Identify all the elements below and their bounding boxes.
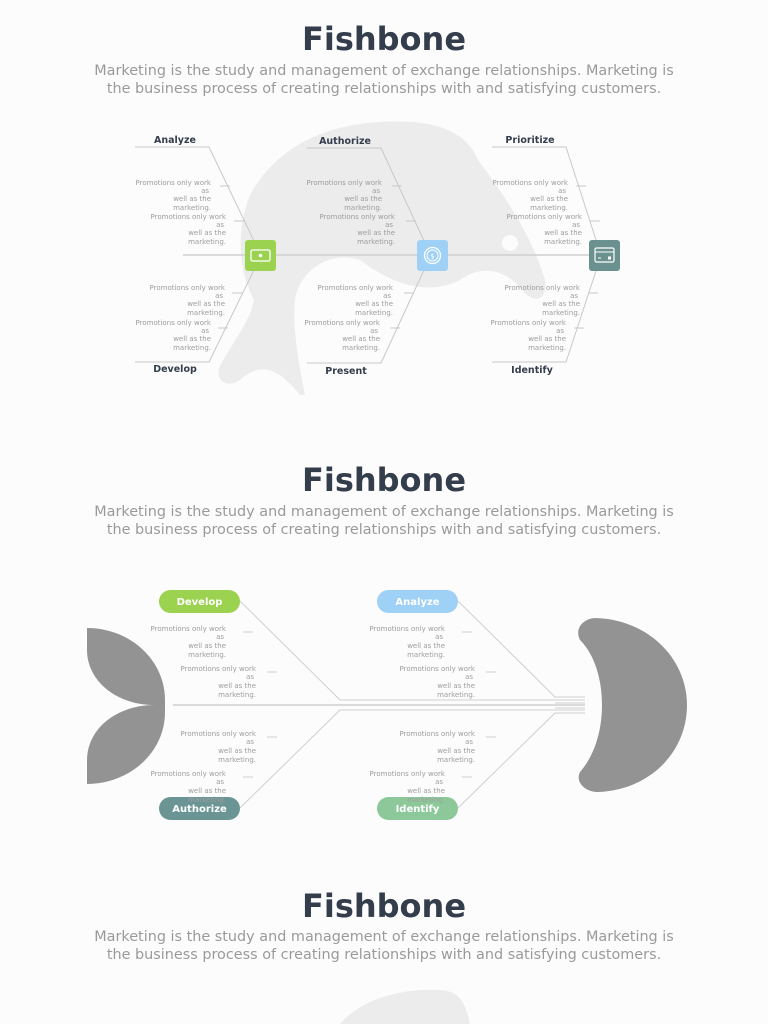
subtitle: section 1: the business process of creating relationships with and satisfying customers. <box>107 80 661 96</box>
text blocks: marketing. <box>407 651 445 659</box>
group: Authorize/Present: well as the <box>344 195 382 203</box>
group: Analyze/Develop: Promotions only work <box>136 319 212 327</box>
text blocks: as <box>246 673 254 681</box>
group: Authorize/Present: as <box>383 292 391 300</box>
text blocks: Promotions only work <box>181 665 257 673</box>
text blocks: Promotions only work <box>370 770 446 778</box>
group: Analyze/Develop: well as the <box>188 229 226 237</box>
head <box>578 618 687 792</box>
group: Prioritize/Identify: as <box>570 292 578 300</box>
text blocks: Promotions only work <box>181 730 257 738</box>
text blocks: as <box>216 778 224 786</box>
group: Authorize/Present: Promotions only work <box>305 319 381 327</box>
text blocks: well as the <box>188 642 226 650</box>
group: Prioritize/Identify: well as the <box>530 195 568 203</box>
text blocks: as <box>216 633 224 641</box>
spine <box>183 254 620 256</box>
group: Analyze/Develop: marketing. <box>187 309 225 317</box>
text blocks: Promotions only work <box>400 665 476 673</box>
group: Prioritize/Identify: Prioritize <box>505 135 555 146</box>
group: Analyze/Develop: well as the <box>187 300 225 308</box>
group: Analyze/Develop: Develop <box>153 364 197 375</box>
group: Authorize/Present: Promotions only work <box>320 213 396 221</box>
group: Prioritize/Identify: as <box>572 221 580 229</box>
text blocks: as <box>465 738 473 746</box>
text blocks: well as the <box>218 682 256 690</box>
text blocks: Promotions only work <box>151 770 227 778</box>
subtitle: section 1: Marketing is the study and management of exchange relationships. Marketing is <box>94 63 674 79</box>
icon: money <box>245 240 276 271</box>
text blocks: marketing. <box>188 651 226 659</box>
group: Analyze/Develop: marketing. <box>173 204 211 212</box>
group: Analyze/Develop: Promotions only work <box>136 179 212 187</box>
group: Authorize/Present: Present <box>325 366 367 377</box>
group: Prioritize/Identify: marketing. <box>542 309 580 317</box>
group: Prioritize/Identify <box>491 135 620 376</box>
group: Prioritize/Identify: marketing. <box>544 238 582 246</box>
subtitle: section 2: Marketing is the study and management of exchange relationships. Marketing is <box>94 504 674 520</box>
text blocks: Promotions only work <box>400 730 476 738</box>
group: Authorize/Present: well as the <box>357 229 395 237</box>
subtitle: section 3: the business process of creating relationships with and satisfying customers. <box>107 946 661 962</box>
text blocks: marketing. <box>437 756 475 764</box>
tail <box>87 628 165 705</box>
group: Authorize/Present: marketing. <box>342 344 380 352</box>
text blocks: marketing. <box>407 796 445 804</box>
group: Authorize/Present: $ <box>430 252 435 260</box>
pill: Analyze <box>377 590 458 613</box>
pill: Develop: Develop <box>177 597 222 608</box>
group: Prioritize/Identify: as <box>556 327 564 335</box>
group: Authorize/Present: as <box>385 221 393 229</box>
group: Prioritize/Identify: well as the <box>542 300 580 308</box>
group: Prioritize/Identify: Promotions only work <box>505 284 581 292</box>
group: Authorize/Present: marketing. <box>355 309 393 317</box>
icon: coin <box>417 240 448 271</box>
text blocks: Promotions only work <box>151 625 227 633</box>
group: Authorize/Present: well as the <box>342 335 380 343</box>
text blocks: marketing. <box>437 691 475 699</box>
group: Prioritize/Identify: Promotions only work <box>507 213 583 221</box>
group: Authorize/Present: marketing. <box>357 238 395 246</box>
text blocks: well as the <box>218 747 256 755</box>
fish silhouette: section 3 partial <box>340 990 470 1024</box>
text blocks: marketing. <box>218 691 256 699</box>
text blocks: well as the <box>407 787 445 795</box>
icon: card <box>589 240 620 271</box>
group: Prioritize/Identify: Promotions only work <box>493 179 569 187</box>
group: Analyze/Develop: marketing. <box>188 238 226 246</box>
group: Authorize/Present: well as the <box>355 300 393 308</box>
diagram 1: fishbone with fish silhouette <box>135 122 620 395</box>
group: Analyze/Develop: Analyze <box>154 135 196 146</box>
pill: Authorize: Authorize <box>172 804 227 815</box>
text blocks: as <box>465 673 473 681</box>
group: Analyze/Develop: well as the <box>173 335 211 343</box>
group: Authorize/Present: as <box>370 327 378 335</box>
text blocks: well as the <box>437 682 475 690</box>
group: Analyze/Develop: Promotions only work <box>151 213 227 221</box>
pill: Identify: Identify <box>396 804 440 815</box>
subtitle: section 2 <box>94 504 674 538</box>
subtitle: section 3: Marketing is the study and management of exchange relationships. Marketing is <box>94 929 674 945</box>
title: section 1: Fishbone <box>302 20 466 58</box>
group: Analyze/Develop: as <box>215 292 223 300</box>
group: Analyze/Develop: as <box>201 327 209 335</box>
subtitle: section 3 <box>94 929 674 962</box>
title: section 3: Fishbone <box>302 887 466 925</box>
text blocks: well as the <box>407 642 445 650</box>
text blocks: as <box>246 738 254 746</box>
group: Prioritize/Identify: marketing. <box>528 344 566 352</box>
group: Authorize/Present: Authorize <box>319 136 371 147</box>
group: Prioritize/Identify: marketing. <box>530 204 568 212</box>
spine <box>173 704 585 706</box>
fish silhouette background <box>218 122 545 395</box>
group: Analyze/Develop: well as the <box>173 195 211 203</box>
text blocks <box>151 625 476 804</box>
pill: Develop <box>159 590 240 613</box>
group: Authorize/Present: Promotions only work <box>318 284 394 292</box>
group: Analyze/Develop: Promotions only work <box>150 284 226 292</box>
pill: Analyze: Analyze <box>395 597 440 608</box>
text blocks: marketing. <box>218 756 256 764</box>
group: Authorize/Present: Promotions only work <box>307 179 383 187</box>
subtitle: section 2: the business process of creating relationships with and satisfying customers. <box>107 522 661 538</box>
subtitle: section 1 <box>94 63 674 96</box>
group: Prioritize/Identify: Identify <box>511 365 554 376</box>
text blocks: marketing. <box>188 796 226 804</box>
text blocks: as <box>435 778 443 786</box>
pill: Authorize <box>159 797 240 820</box>
group: Prioritize/Identify: as <box>558 187 566 195</box>
text blocks: well as the <box>188 787 226 795</box>
title: section 2: Fishbone <box>302 461 466 499</box>
group: Prioritize/Identify: well as the <box>544 229 582 237</box>
group: Prioritize/Identify: well as the <box>528 335 566 343</box>
pill: Identify <box>377 797 458 820</box>
group: Prioritize/Identify: Promotions only work <box>491 319 567 327</box>
text blocks: well as the <box>437 747 475 755</box>
text blocks: as <box>435 633 443 641</box>
group: Analyze/Develop <box>135 135 276 375</box>
group: Authorize/Present: as <box>372 187 380 195</box>
group: Authorize/Present: marketing. <box>344 204 382 212</box>
text blocks: Promotions only work <box>370 625 446 633</box>
group: Authorize/Present <box>305 136 448 377</box>
group: Analyze/Develop: as <box>201 187 209 195</box>
group: Analyze/Develop: as <box>216 221 224 229</box>
group: Analyze/Develop: marketing. <box>173 344 211 352</box>
